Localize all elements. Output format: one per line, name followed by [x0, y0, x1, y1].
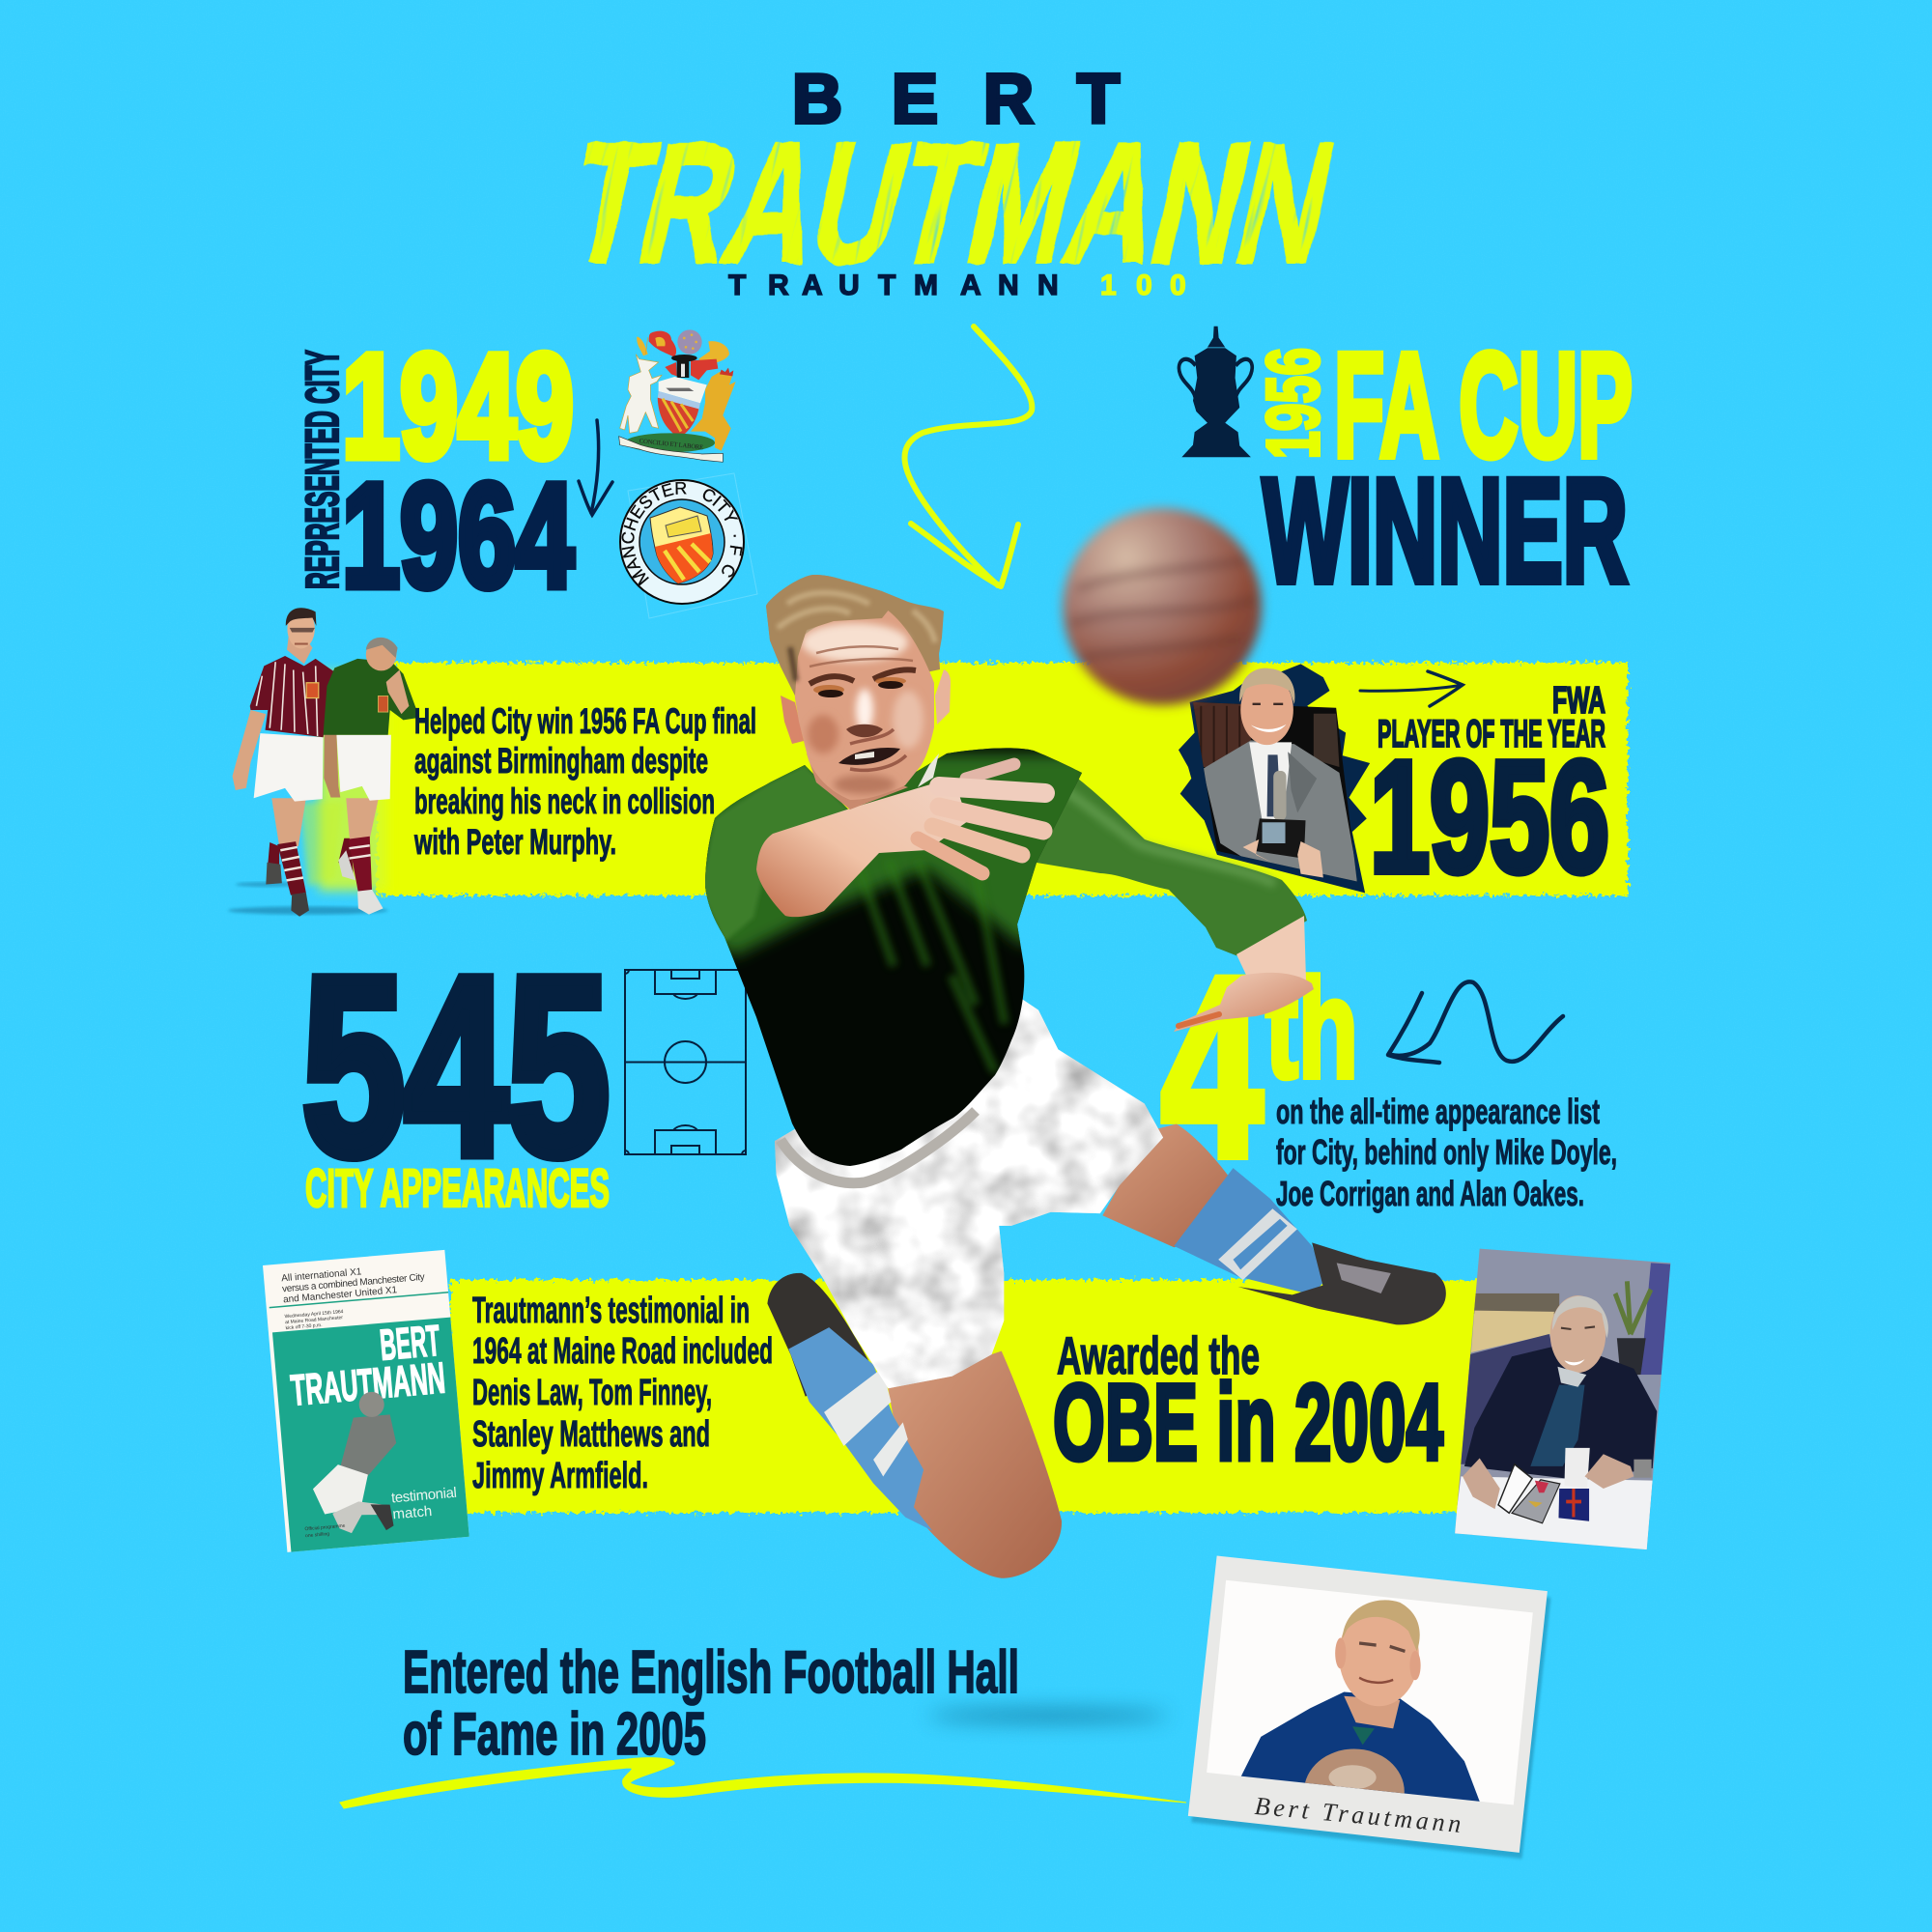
- arrow: navy to FWA: [1360, 671, 1463, 706]
- label: represented city: REPRESENTED CITY: [298, 350, 349, 589]
- neck: [807, 753, 908, 810]
- face: [792, 607, 934, 800]
- left forearm and hand: [756, 764, 1045, 917]
- jersey body: [696, 744, 1092, 1179]
- text: testimonial: [472, 1291, 773, 1496]
- left boot: [767, 1273, 871, 1397]
- photo: testimonial programme: one shilling: [305, 1531, 330, 1539]
- text: appearance list: on the all-time appearance list: [1276, 1092, 1600, 1131]
- text: OBE: OBE in 2004: [1053, 1362, 1443, 1483]
- arrow: navy down: [579, 420, 612, 515]
- text: appearance list: Joe Corrigan and Alan Oakes.: [1276, 1174, 1584, 1213]
- player: maroon shirt: [250, 656, 334, 737]
- photo: testimonial programme: Official programme: [304, 1523, 346, 1532]
- photo: testimonial programme: at Maine Road Manchester: [285, 1315, 344, 1325]
- left sock: [788, 1327, 932, 1531]
- text: appearance list: for City, behind only Mike Doyle,: [1276, 1132, 1617, 1172]
- right forearm: [1236, 916, 1306, 987]
- underline: yellow brush: [340, 1758, 1186, 1808]
- title: TRAUTMANN 100: TRAUTMANN: [728, 270, 1059, 301]
- right thigh: [1102, 1124, 1250, 1247]
- text: FWA player of the year: [1370, 680, 1609, 905]
- panel: represented city years: [298, 324, 574, 618]
- player: green shirt: [324, 659, 416, 735]
- title: TRAUTMANN 100: 100: [1100, 270, 1186, 301]
- text: FWA player of the year: 1956: [1370, 728, 1609, 905]
- collar: [918, 753, 939, 787]
- text: OBE: Awarded the: [1057, 1325, 1260, 1385]
- suffix: th: th: [1265, 950, 1358, 1107]
- icon: Manchester City badge: MANCHESTER: [622, 481, 687, 585]
- photo: FWA player of the year: [1179, 664, 1370, 893]
- photo: OBE medals: [1451, 1249, 1671, 1551]
- illustration: diving Bert Trautmann: [696, 575, 1446, 1578]
- eyes and brows: [810, 669, 916, 684]
- title: BERT: BERT: [792, 61, 1120, 138]
- hair base: [766, 575, 944, 696]
- mouth: [838, 748, 900, 765]
- icon: FA Cup trophy: [1179, 327, 1252, 457]
- photo: testimonial programme: All international X1: [281, 1266, 362, 1284]
- text: OBE: [1053, 1325, 1443, 1483]
- text: testimonial: 1964 at Maine Road included: [472, 1331, 773, 1372]
- photo: testimonial programme: TRAUTMANN: [289, 1352, 447, 1415]
- player: left player shorts: [254, 733, 324, 802]
- icon: Manchester City badge: C: [722, 564, 734, 578]
- year: 1964: 1964: [342, 453, 574, 618]
- stat: 545 city appearances: [302, 924, 610, 1218]
- player: right player legs: [346, 798, 379, 842]
- panel: FA Cup winner: [1179, 323, 1633, 613]
- text: hall of fame: Entered the English Football Hall: [403, 1639, 1019, 1706]
- text: FA Cup final: with Peter Murphy.: [413, 822, 616, 862]
- text: appearance list: [1276, 1092, 1617, 1213]
- player: back legs: [268, 842, 279, 865]
- player: right player shorts: [336, 735, 391, 801]
- text: hall of fame: [403, 1639, 1019, 1768]
- player: left player head: [287, 609, 315, 649]
- player: left player legs: [271, 798, 306, 846]
- jersey sleeve and right arm: [947, 748, 1307, 958]
- text: FWA player of the year: PLAYER OF THE YEAR: [1378, 713, 1605, 755]
- icon: Manchester coat of arms: CONCILIO ET LABORE: [639, 438, 703, 451]
- text: FA Cup final: against Birmingham despite: [414, 741, 708, 781]
- player: hanging arm: [324, 734, 340, 797]
- text: testimonial: Stanley Matthews and: [472, 1414, 710, 1455]
- year: 1949: 1949: [342, 324, 574, 489]
- icon: Manchester City badge: [619, 473, 757, 618]
- forehead wrinkles: [810, 646, 913, 667]
- right sock: [1174, 1168, 1325, 1294]
- text: FA Cup final: [413, 701, 756, 862]
- right ear: [935, 669, 951, 724]
- programme photo of keeper: [305, 1390, 404, 1536]
- photo: testimonial programme: BERT: [378, 1316, 441, 1370]
- text: hall of fame: of Fame in 2005: [403, 1701, 706, 1768]
- hair front: [766, 575, 894, 696]
- player: left arm: [233, 710, 266, 790]
- number: 4: 4: [1161, 924, 1264, 1210]
- number: 545: 545: [302, 924, 610, 1208]
- icon: blurred football: [1063, 508, 1262, 705]
- photo: two City players: [228, 608, 416, 917]
- title: TRAUTMANN brush lettering: TRAUTMANN: [553, 108, 1350, 298]
- signature: Bert Trautmann: [1254, 1792, 1463, 1838]
- shorts waistband: [781, 1111, 976, 1183]
- heading: WINNER: WINNER: [1263, 448, 1628, 613]
- icon: football pitch: [625, 970, 746, 1154]
- panel: yellow band, FA Cup final and FWA: [319, 663, 1628, 895]
- right hand: [1174, 973, 1314, 1032]
- photo: polaroid: [1188, 1555, 1550, 1859]
- photo: testimonial programme: testimonial: [390, 1485, 458, 1506]
- shorts: [775, 995, 1163, 1388]
- label: city appearances: CITY APPEARANCES: [305, 1157, 610, 1218]
- text: FA Cup final: breaking his neck in collision: [414, 781, 715, 821]
- left ear: [781, 696, 804, 744]
- head: [766, 575, 951, 810]
- icon: Manchester City badge: · F: [730, 535, 742, 556]
- nose: [846, 724, 883, 737]
- text: testimonial: Jimmy Armfield.: [472, 1456, 648, 1496]
- text: FA Cup final: Helped City win 1956 FA Cup final: [414, 701, 756, 741]
- photo: testimonial programme: and Manchester United X1: [283, 1285, 398, 1305]
- stat: 4th: [1161, 924, 1358, 1210]
- label: 1956 vertical: 1956: [1252, 348, 1335, 459]
- arrow: navy squiggle: [1388, 981, 1563, 1063]
- photo: testimonial programme: Wednesday April 15th 1964: [284, 1309, 344, 1320]
- photo: testimonial programme: [263, 1250, 469, 1552]
- panel: yellow band, testimonial and OBE: [450, 1280, 1484, 1513]
- player: right player head: [366, 639, 396, 670]
- title: [553, 61, 1350, 301]
- right boot: [1238, 1242, 1446, 1324]
- photo: testimonial programme: versus a combined Manchester City: [282, 1272, 425, 1294]
- heading: FA CUP: FA CUP: [1334, 323, 1633, 488]
- icon: Manchester coat of arms: [619, 329, 736, 462]
- legs and shorts: [767, 995, 1446, 1578]
- shorts texture: [775, 995, 1163, 1388]
- player shadow: [927, 1710, 1169, 1721]
- icon: Manchester City badge: CITY: [703, 489, 738, 522]
- text: testimonial: Trautmann’s testimonial in: [472, 1291, 750, 1331]
- arrow: yellow zigzag: [904, 327, 1032, 586]
- text: FWA player of the year: FWA: [1552, 680, 1605, 722]
- text: testimonial: Denis Law, Tom Finney,: [472, 1373, 712, 1413]
- photo: testimonial programme: kick off 7-30 p.m.: [285, 1322, 323, 1331]
- left knee and thigh: [888, 1351, 1062, 1578]
- photo: testimonial programme: match: [392, 1503, 433, 1522]
